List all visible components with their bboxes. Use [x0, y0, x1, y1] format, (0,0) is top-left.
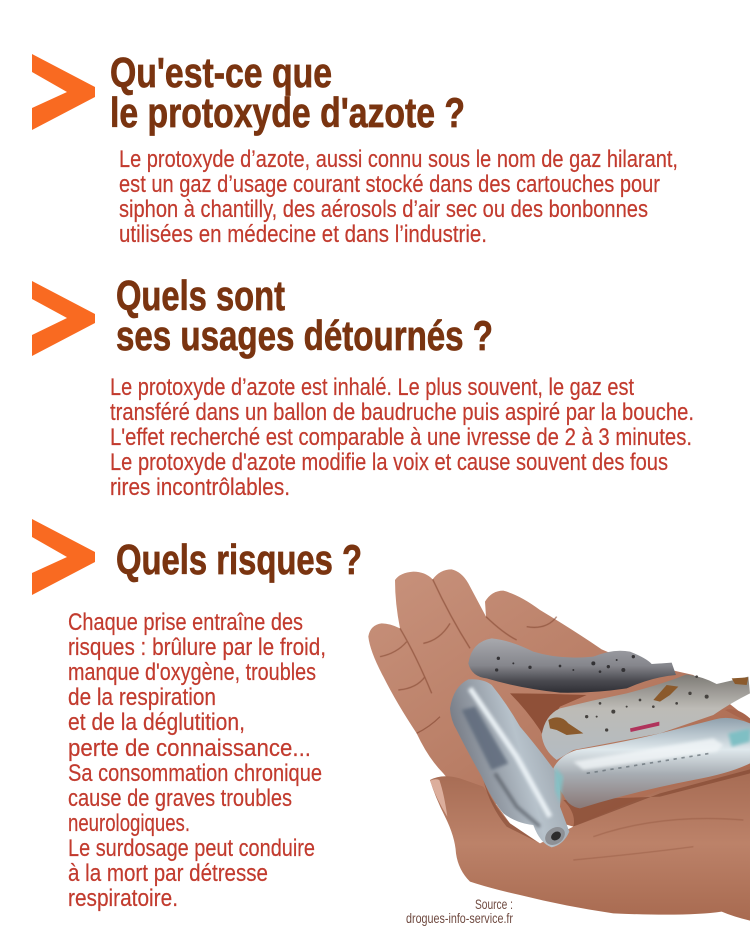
- heading 3: Quels risques ?: [116, 536, 362, 583]
- source note: [406, 896, 513, 926]
- body text 3: respiratoire.: [68, 885, 178, 912]
- source note: drogues-info-service.fr: [406, 910, 513, 926]
- body text 3: à la mort par détresse: [68, 860, 268, 887]
- cartridge: bright silver: [553, 718, 750, 808]
- heading 1: Qu'est-ce que: [110, 49, 332, 96]
- heading 1: le protoxyde d'azote ?: [110, 89, 465, 136]
- body text 3: manque d'oxygène, troubles: [68, 659, 316, 686]
- body text 1: utilisées en médecine et dans l’industrie.: [119, 221, 487, 248]
- body text 3: cause de graves troubles: [68, 785, 292, 812]
- chevron icon 1: [32, 54, 95, 130]
- body text 3: Le surdosage peut conduire: [68, 835, 315, 862]
- body text 2: Le protoxyde d’azote est inhalé. Le plus souvent, le gaz est: [110, 374, 634, 401]
- body text 3: de la respiration: [68, 684, 216, 711]
- chevron icon 2: [32, 281, 95, 356]
- heading 1: [110, 49, 465, 136]
- body text 3: et de la déglutition,: [68, 709, 245, 736]
- body text 2: rires incontrôlables.: [110, 474, 290, 501]
- section: risks: [32, 519, 362, 912]
- heading 2: Quels sont: [116, 272, 285, 319]
- source note: Source :: [475, 896, 513, 912]
- heading 2: ses usages détournés ?: [116, 312, 493, 359]
- heading 2: [116, 272, 493, 359]
- body text 3: risques : brûlure par le froid,: [68, 634, 326, 661]
- body text 2: [110, 374, 694, 501]
- body text 3: perte de connaissance...: [68, 735, 311, 762]
- body text 3: [68, 609, 326, 912]
- section: diverted uses: [32, 272, 694, 501]
- body text 1: siphon à chantilly, des aérosols d’air sec ou des bonbonnes: [119, 196, 648, 223]
- hand: [368, 569, 750, 921]
- body text 1: [119, 146, 678, 248]
- illustration: hand holding cartridges: [368, 569, 750, 921]
- cartridge: dark grey: [468, 638, 676, 693]
- section: what is nitrous oxide: [32, 49, 678, 248]
- body text 3: Sa consommation chronique: [68, 760, 322, 787]
- cartridge: standing left: [450, 679, 569, 849]
- cartridge: rusty: [542, 674, 750, 760]
- body text 3: neurologiques.: [68, 810, 190, 837]
- body text 3: Chaque prise entraîne des: [68, 609, 303, 636]
- chevron icon 3: [32, 519, 95, 595]
